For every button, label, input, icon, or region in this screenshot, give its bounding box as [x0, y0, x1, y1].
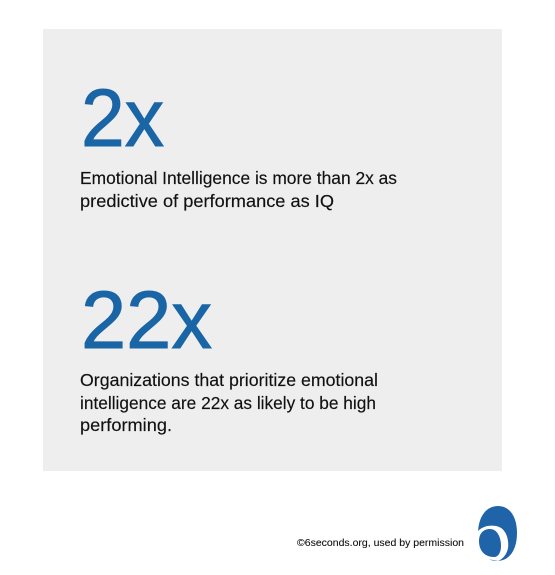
credit line: ©6seconds.org, used by permission [297, 537, 464, 549]
text block: 2x description: Emotional Intelligence is more than 2x as [80, 168, 397, 188]
text block: 22x description [80, 370, 378, 435]
stat: 2x: 2x [81, 73, 164, 164]
text block: 22x description: intelligence are 22x as likely to be high [80, 393, 376, 413]
panel: statistics background [43, 29, 502, 471]
text block: 2x description [80, 168, 397, 211]
text block: 22x description: performing. [80, 415, 172, 435]
stat: 22x: 22x [81, 275, 212, 366]
text block: 2x description: predictive of performance as IQ [80, 191, 334, 211]
icon: Six Seconds logo [478, 506, 517, 561]
text block: 22x description: Organizations that prioritize emotional [80, 370, 378, 390]
